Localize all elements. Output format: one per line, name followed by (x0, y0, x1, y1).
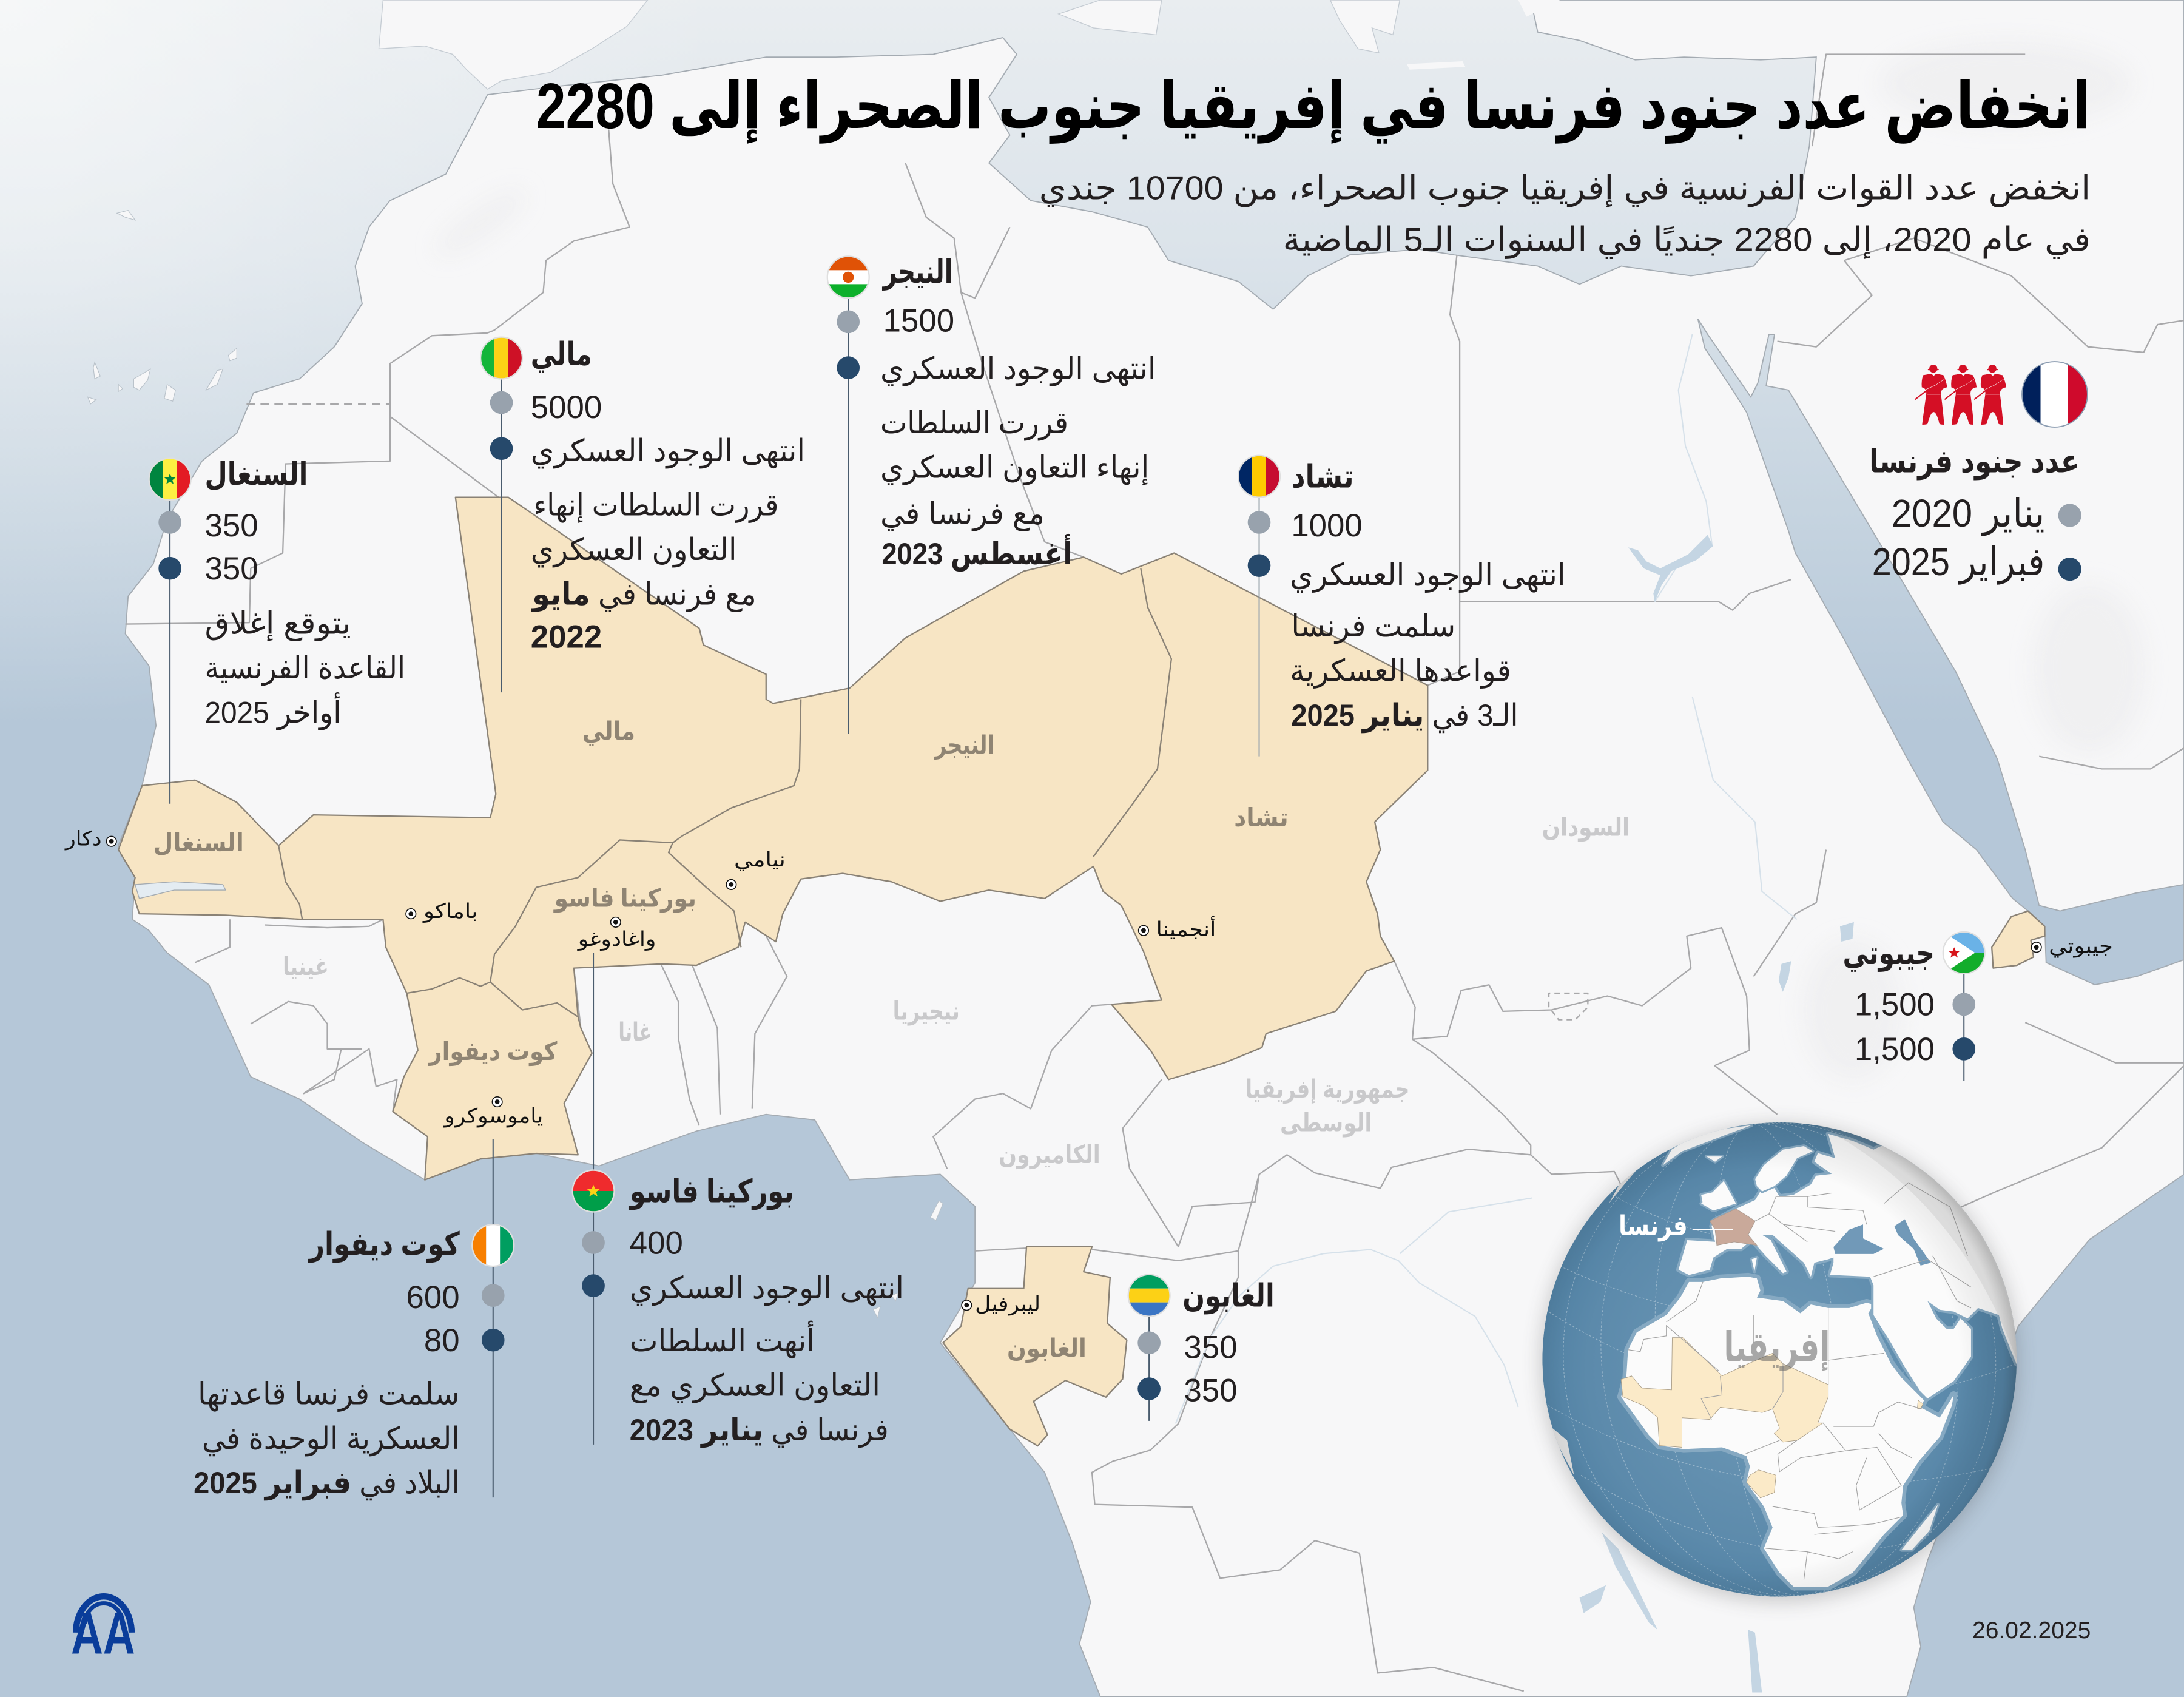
capital: Ouagadougou: واغادوغو (577, 928, 656, 951)
logo: Anadolu Agency: AA (71, 1601, 135, 1666)
globe land: Scandinavia and islands (1663, 1125, 1938, 1550)
panel: Chad: انتهى الوجود العسكري (1290, 557, 1566, 593)
subtitle: في عام 2020، إلى 2280 جنديًا في السنوات الـ5 الماضية (1283, 220, 2091, 259)
icon: Burkina Faso flag (573, 1170, 615, 1212)
icon: Mali flag (480, 337, 522, 379)
globe: France (1710, 1209, 1757, 1246)
panel: Ivory Coast: سلمت فرنسا قاعدتها (198, 1376, 460, 1412)
panel: Niger: أغسطس 2023 (881, 533, 1073, 572)
panel: Burkina Faso: بوركينا فاسو (628, 1173, 794, 1210)
highlighted country: Djibouti (1992, 911, 2044, 968)
icon: Gabon flag (1128, 1275, 1170, 1317)
capital: Niamey (726, 849, 786, 889)
panel: Niger: إنهاء التعاون العسكري (880, 450, 1149, 485)
panel: Senegal: 350 (205, 551, 258, 587)
panel: Senegal: 350 (205, 508, 258, 544)
icon: three soldiers (1915, 365, 2006, 425)
capital: Libreville: ليبرفيل (975, 1293, 1040, 1315)
globe: highlighted Sahel (1621, 1338, 1828, 1447)
map labels: highlighted countries: تشاد (1234, 803, 1289, 831)
map labels: other countries: جمهورية إفريقيا (1245, 1075, 1409, 1104)
globe locator (1536, 1098, 2027, 1621)
map labels: highlighted countries: بوركينا فاسو (553, 885, 696, 914)
globe label: Africa: إفريقيا (1724, 1325, 1830, 1372)
panel: Djibouti (1842, 932, 1985, 1081)
capital: Djibouti: جيبوتي (2049, 935, 2113, 957)
map labels: highlighted countries: السنغال (153, 829, 244, 857)
panel: Mali (480, 337, 805, 692)
panel: Mali: مع فرنسا في مايو (530, 576, 757, 612)
panel: Senegal (149, 456, 405, 804)
panel: Chad: قواعدها العسكرية (1290, 653, 1511, 689)
panel: Burkina Faso: أنهت السلطات (630, 1320, 815, 1359)
map labels: other countries: الكاميرون (999, 1141, 1100, 1170)
graticule (1536, 1098, 2023, 1621)
map labels: other countries: الوسطى (1280, 1108, 1372, 1138)
legend item: February 2025: فبراير 2025 (1872, 540, 2044, 585)
panel: Mali: التعاون العسكري (531, 532, 737, 568)
panel: Djibouti: جيبوتي (1842, 936, 1935, 972)
panel: Gabon (1128, 1275, 1275, 1421)
map: rivers and lakes (1176, 334, 1854, 1693)
panel: Mali: 5000 (531, 390, 602, 425)
panel: Chad: سلمت فرنسا (1291, 609, 1455, 644)
map labels: other countries (283, 814, 1630, 1170)
subtitle: انخفض عدد القوات الفرنسية في إفريقيا جنوب الصحراء، من 10700 جندي (1039, 169, 2091, 207)
map labels: highlighted countries: مالي (582, 717, 635, 746)
capital: Bamako (406, 900, 478, 923)
capital: Dakar: دكار (64, 828, 102, 851)
legend item: January 2020: يناير 2020 (1892, 491, 2044, 536)
map labels: other countries: غينيا (283, 953, 329, 980)
icon: Chad flag (1238, 456, 1280, 498)
panel: Niger: النيجر (881, 254, 952, 291)
globe water: Black Sea and Caspian (1833, 1220, 1931, 1266)
panel: Mali: مالي (531, 337, 592, 373)
capital: Bamako: باماكو (422, 900, 478, 923)
panel: Niger: انتهى الوجود العسكري (880, 351, 1156, 386)
icon: Niger flag (827, 256, 869, 298)
icon: Djibouti flag (1943, 932, 1985, 974)
panel: Ivory Coast: العسكرية الوحيدة في (202, 1421, 460, 1457)
capital: Dakar (64, 828, 116, 851)
capital: Ouagadougou (577, 917, 656, 951)
panel: Niger (827, 254, 1156, 734)
date: 26.02.2025 (1972, 1618, 2091, 1644)
panel: Burkina Faso: انتهى الوجود العسكري (630, 1270, 904, 1306)
panel: Mali: قررت السلطات إنهاء (533, 487, 778, 523)
capital: N'Djamena (1139, 916, 1216, 941)
panel: Burkina Faso: 400 (630, 1225, 683, 1261)
panel: Niger: 1500 (883, 303, 954, 339)
panel: Niger: مع فرنسا في (880, 496, 1045, 531)
globe land: Eurasia (1679, 1127, 2027, 1398)
highlighted country: Gabon (943, 1247, 1127, 1446)
panel: Burkina Faso (573, 953, 904, 1448)
panel: Niger: قررت السلطات (880, 405, 1068, 441)
map labels: highlighted countries: النيجر (934, 731, 994, 760)
panel: Mali: انتهى الوجود العسكري (531, 433, 805, 469)
highlighted countries: Sahel block (118, 498, 1427, 1180)
map labels: highlighted countries: الغابون (1007, 1334, 1087, 1363)
panel: Ivory Coast: 600 (406, 1280, 460, 1315)
map labels: other countries: نيجيريا (893, 997, 960, 1027)
panel: Ivory Coast: كوت ديفوار (308, 1227, 460, 1263)
globe sphere shading (1542, 1122, 2017, 1597)
globe: highlighted Gabon and Djibouti (1747, 1400, 1923, 1498)
panel: Burkina Faso: التعاون العسكري مع (630, 1368, 880, 1404)
panel: Ivory Coast: البلاد في فبراير 2025 (194, 1465, 460, 1501)
subtitle (1039, 169, 2091, 259)
map labels: highlighted countries: كوت ديفوار (428, 1037, 558, 1067)
panel: Djibouti: 1,500 (1855, 1031, 1935, 1067)
panel: Chad: 1000 (1291, 508, 1363, 544)
capital: Yamoussoukro (443, 1097, 543, 1128)
map: terrain shading (429, 42, 2145, 1079)
panel: Djibouti: 1,500 (1855, 987, 1935, 1023)
legend heading: عدد جنود فرنسا (1869, 444, 2080, 480)
icon: Senegal flag (149, 458, 191, 500)
panel: Senegal: يتوقع إغلاق (205, 606, 351, 642)
panel: Gabon: الغابون (1182, 1278, 1275, 1315)
map: Red Sea and Gulf of Aden (1698, 319, 2184, 985)
capital: N'Djamena: أنجمينا (1156, 916, 1216, 941)
panel: Chad: تشاد (1291, 459, 1354, 495)
panel: Mali: 2022 (531, 619, 602, 655)
panel: Chad (1238, 456, 1566, 757)
panel: Gabon: 350 (1184, 1373, 1238, 1409)
icon: Ivory Coast flag (472, 1224, 514, 1266)
map labels: other countries: السودان (1542, 814, 1630, 843)
panel: Chad: الـ3 في يناير 2025 (1291, 698, 1518, 734)
globe land: Africa (1621, 1277, 1953, 1587)
panel: Senegal: القاعدة الفرنسية (205, 650, 405, 686)
icon: French flag (2021, 361, 2089, 428)
panel: Ivory Coast: 80 (424, 1323, 460, 1358)
legend: French troop numbers (1869, 361, 2089, 585)
panel: Burkina Faso: فرنسا في يناير 2023 (630, 1412, 889, 1448)
globe sphere (1536, 1098, 2027, 1621)
capital: Yamoussoukro: ياموسوكرو (443, 1105, 543, 1128)
panel: Senegal: السنغال (205, 456, 308, 492)
map labels: other countries: غانا (618, 1018, 652, 1046)
globe: borders (1628, 1183, 1971, 1580)
map labels: highlighted countries (153, 717, 1289, 1363)
globe label: France: فرنسا (1619, 1210, 1688, 1241)
capital: Niamey: نيامي (734, 849, 786, 871)
globe shadow (1543, 1126, 2017, 1600)
panel: Ivory Coast (194, 1139, 514, 1501)
panel: Senegal: أواخر 2025 (205, 692, 342, 731)
panel: Gabon: 350 (1184, 1330, 1238, 1366)
